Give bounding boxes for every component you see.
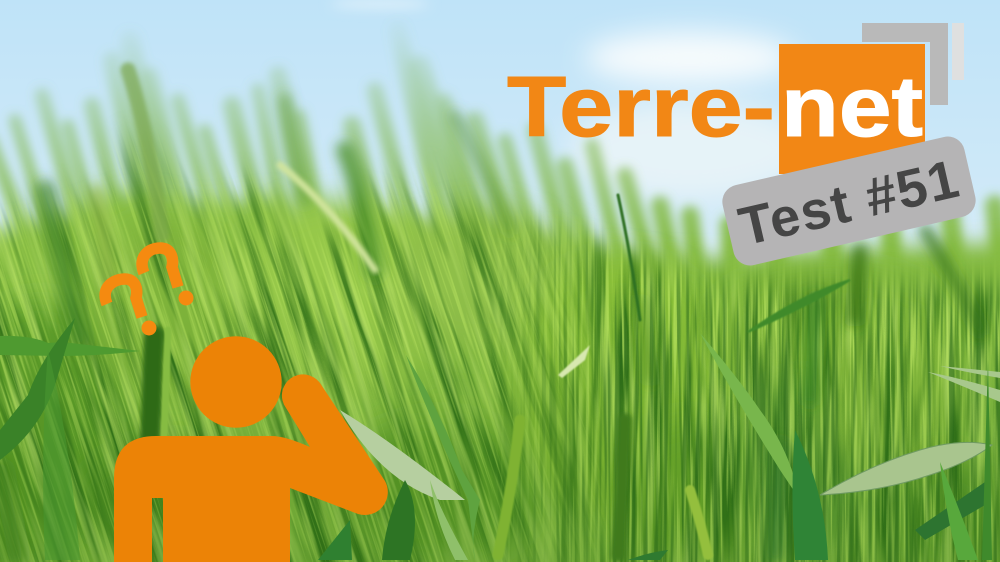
wheat field colour masses [0, 190, 1000, 562]
leaves [0, 280, 1000, 560]
leaf: right stem [982, 360, 992, 560]
leaf: top right small blades [928, 366, 1000, 402]
leaf: bottom centre blade [318, 520, 352, 560]
leaf: striped blade bottom [792, 430, 828, 560]
logo: wordmark: Terre- [507, 60, 775, 155]
logo: orange square [779, 44, 925, 174]
leaf: lower left blade [43, 350, 80, 560]
leaf: left upright blade [0, 318, 75, 460]
body and arm [114, 374, 388, 562]
leaf: centre right blade [700, 333, 800, 500]
leaf: bright upright blade [940, 462, 978, 560]
leaf: pale blade by arm [340, 410, 465, 500]
person thinking icon [114, 336, 388, 562]
logo: wordmark [507, 60, 923, 155]
sky [0, 0, 1000, 330]
leaf: dark right blade [915, 482, 985, 540]
wheat fringe against the sky [0, 30, 1000, 300]
question mark left [105, 279, 156, 336]
head [190, 336, 282, 428]
leaf: pale ear [558, 345, 590, 378]
leaf: dark distant blade [748, 280, 850, 332]
distant blurred ears [0, 100, 980, 555]
logo: wordmark: net [781, 60, 923, 155]
question mark right [142, 248, 194, 306]
leaf: dark lower blade [382, 480, 415, 560]
streak texture: leaning awns on the left, upright on the right [0, 126, 1000, 562]
leaf: left blade [0, 336, 140, 356]
leaf: pale broad leaf right [820, 442, 992, 495]
wheat ears in focus [128, 70, 708, 555]
leaf: lower blade near centre [430, 480, 468, 560]
badge: test number: Test #51 [734, 149, 965, 257]
question marks [105, 248, 194, 336]
leaf: bottom small blade [628, 550, 668, 560]
lower field shade [0, 290, 1000, 562]
logo: grey corner marks [862, 23, 964, 105]
leaf: centre curved blade [406, 355, 480, 560]
